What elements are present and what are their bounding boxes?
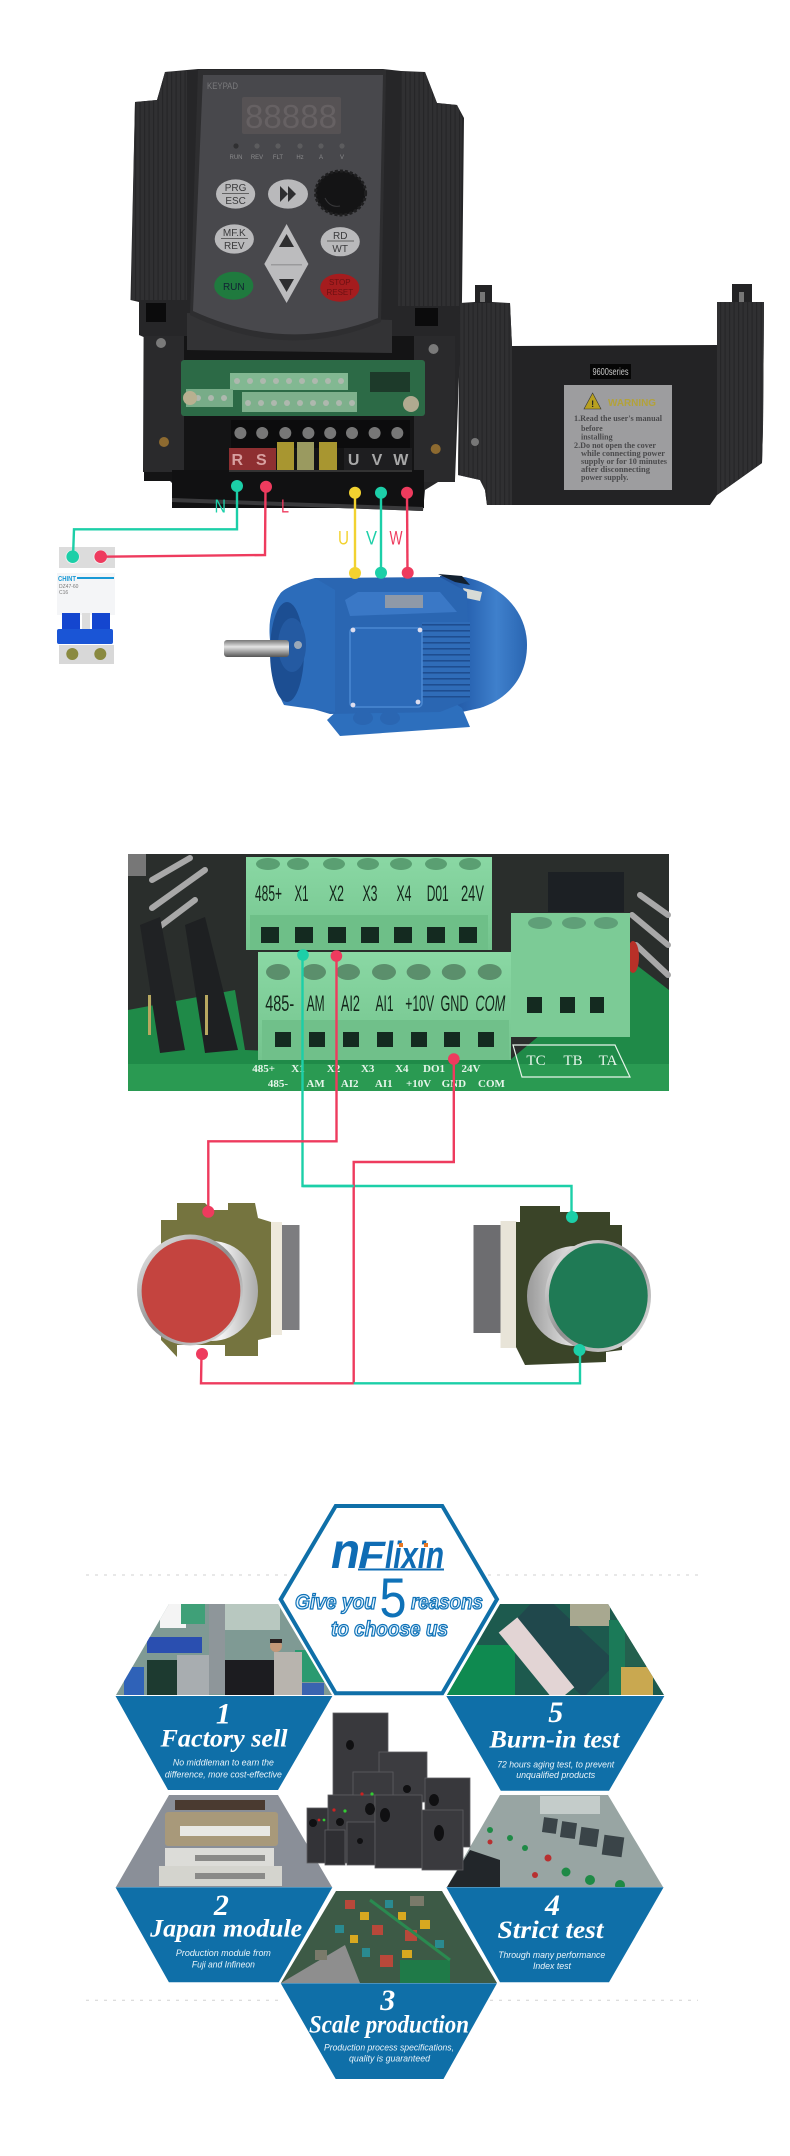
upper terminal block: 485+	[255, 881, 282, 906]
hexagon 5: burn-in test: 5	[548, 1696, 563, 1729]
status LEDs: V	[340, 155, 344, 161]
electric motor	[224, 574, 527, 736]
upper terminal block: X2	[329, 881, 344, 906]
key MF.K REV	[215, 224, 254, 254]
output wires U V W	[338, 487, 414, 579]
hexagon 4: strict test: Through many performance	[498, 1950, 605, 1960]
key RD WT: RD	[333, 231, 347, 242]
warning label: while connecting power	[581, 449, 665, 458]
upper terminal block: X4	[396, 881, 412, 906]
headline	[295, 1566, 483, 1641]
keypad label: KEYPAD	[207, 81, 238, 91]
relay terminal block	[511, 913, 630, 1037]
silkscreen terminal labels: 485-	[268, 1078, 288, 1090]
red push button	[137, 1203, 300, 1357]
key MF.K REV: REV	[224, 241, 245, 252]
test bench photo	[447, 1795, 663, 1887]
red LED	[627, 941, 639, 973]
knob	[316, 171, 366, 215]
up and down keys	[264, 224, 308, 303]
silkscreen terminal labels: 485+	[252, 1063, 275, 1075]
key PRG ESC	[216, 179, 255, 209]
product line-up of inverters	[307, 1713, 470, 1870]
status LEDs: RUN	[230, 155, 242, 161]
power terminals: S	[256, 452, 267, 469]
hexagon 2: japan module	[110, 1790, 340, 1982]
headline: to choose us	[331, 1618, 448, 1641]
burn-in photo	[447, 1604, 664, 1695]
dashed guide lines	[86, 1575, 698, 2000]
circuit breaker	[57, 547, 115, 664]
logo NFlixin: n	[331, 1523, 360, 1579]
silkscreen relay labels: TC	[526, 1053, 546, 1069]
series badge: 9600series	[592, 367, 628, 378]
warning label: 2.Do not open the cover	[574, 441, 656, 450]
warning label: after disconnecting	[581, 465, 650, 474]
warning label: supply or for 10 minutes	[581, 457, 667, 466]
motor fan cover	[440, 576, 527, 712]
circuit breaker: C16	[59, 590, 68, 596]
key PRG ESC: ESC	[225, 196, 246, 207]
warning label: before	[581, 424, 603, 433]
upper terminal block	[246, 857, 492, 950]
lower terminal block: GND	[440, 991, 468, 1016]
lower terminal block	[258, 952, 511, 1060]
logo NFlixin: lixin	[385, 1535, 444, 1577]
jumpers	[140, 917, 238, 1053]
silkscreen terminal labels: AI2	[341, 1078, 359, 1090]
hexagon 5: burn-in test	[445, 1600, 670, 1791]
logo NFlixin: F	[358, 1535, 387, 1577]
LED display: 88888	[245, 98, 337, 135]
silkscreen terminal labels	[252, 1063, 506, 1090]
silkscreen terminal labels: X1	[291, 1063, 305, 1075]
hexagon 5: burn-in test: 72 hours aging test, to prevent	[497, 1759, 615, 1769]
motor shaft	[224, 640, 289, 657]
centre hexagon: logo and headline	[281, 1506, 497, 1693]
output wires U V W: V	[366, 528, 377, 550]
key RUN: RUN	[223, 282, 245, 293]
warning label: installing	[581, 432, 613, 442]
upper terminal block: X3	[362, 881, 378, 906]
hexagon 4: strict test	[445, 1790, 670, 1982]
series badge	[590, 364, 631, 379]
hexagon 5: burn-in test: unqualified products	[516, 1770, 596, 1780]
key RUN	[214, 272, 253, 300]
control terminal photo	[128, 854, 669, 1091]
hexagon 3: scale production: quality is guaranteed	[349, 2054, 431, 2064]
warning label: power supply.	[581, 473, 628, 482]
upper terminal block: 24V	[461, 881, 484, 906]
key STOP RESET	[320, 274, 359, 302]
chassis screws	[156, 338, 441, 454]
power terminals: V	[372, 452, 383, 469]
upper terminal block: X1	[294, 881, 308, 906]
hexagon 5: burn-in test: Burn-in test	[488, 1726, 621, 1753]
hexagon 2: japan module: 2	[213, 1889, 229, 1922]
silkscreen terminal labels: DO1	[423, 1063, 445, 1075]
silkscreen terminal labels: +10V	[406, 1078, 431, 1090]
warning label: WARNING	[608, 398, 656, 409]
hexagon 3: scale production: Production process specifications,	[324, 2043, 454, 2053]
silkscreen terminal labels: X4	[395, 1063, 409, 1075]
logo NFlixin	[331, 1523, 444, 1579]
status LEDs	[230, 143, 345, 161]
hexagon 1: factory sell: difference, more cost-effective	[165, 1769, 282, 1779]
hexagon 4: strict test: Strict test	[498, 1917, 605, 1944]
silkscreen relay labels: TB	[563, 1053, 583, 1069]
lower terminal block: COM	[475, 991, 506, 1016]
silkscreen terminal labels: X3	[361, 1063, 375, 1075]
input wires N and L	[66, 480, 289, 563]
hexagon 3: scale production: Scale production	[309, 2011, 469, 2038]
key fast forward	[268, 179, 308, 209]
lower terminal block: 485-	[265, 991, 294, 1016]
keypad panel	[187, 70, 392, 353]
hexagon 1: factory sell	[110, 1600, 340, 1790]
hexagon 1: factory sell: No middleman to earn the	[173, 1758, 274, 1768]
power terminals: U	[348, 452, 359, 469]
lower terminal block: AI2	[341, 991, 360, 1016]
headline: reasons	[411, 1591, 483, 1614]
key RD WT	[321, 227, 360, 256]
hexagon 4: strict test: Index test	[533, 1961, 571, 1971]
hexagon 2: japan module: Japan module	[149, 1916, 302, 1943]
status LEDs: A	[319, 155, 323, 161]
input wires N and L: L	[281, 496, 289, 516]
motor housing	[300, 577, 470, 714]
status LEDs: REV	[251, 155, 263, 161]
control board	[181, 360, 425, 416]
hexagon 3: scale production	[278, 1888, 500, 2079]
status LEDs: Hz	[296, 155, 304, 161]
key RD WT: WT	[332, 244, 348, 255]
input wires N and L: N	[214, 496, 226, 516]
upper terminal block: D01	[427, 881, 449, 906]
power module photo	[116, 1795, 332, 1887]
inverter with open terminal cover	[130, 69, 464, 511]
key STOP RESET: STOP	[329, 278, 351, 287]
silkscreen terminal labels: AI1	[375, 1078, 393, 1090]
hexagon 3: scale production: 3	[379, 1984, 395, 2017]
hexagon 2: japan module: Production module from	[176, 1948, 271, 1958]
key PRG ESC: PRG	[225, 183, 247, 194]
key STOP RESET: RESET	[326, 288, 353, 297]
silkscreen terminal labels: COM	[478, 1078, 506, 1090]
key MF.K REV: MF.K	[223, 228, 246, 239]
terminal cover door	[458, 284, 764, 505]
silkscreen terminal labels: AM	[306, 1078, 325, 1090]
lower terminal block: AM	[307, 991, 325, 1016]
circuit breaker: CHINT	[58, 574, 76, 583]
power terminals: W	[393, 452, 409, 469]
heat sink stripes	[150, 858, 668, 975]
circuit breaker: DZ47-60	[59, 584, 79, 590]
motor terminal box	[350, 628, 422, 707]
warning label: !	[591, 399, 594, 409]
silkscreen relay labels: TA	[599, 1053, 618, 1069]
control wires	[196, 949, 586, 1383]
warning label	[564, 385, 672, 490]
hexagon 1: factory sell: Factory sell	[159, 1726, 288, 1753]
green push button	[474, 1206, 651, 1365]
power terminals: R	[232, 452, 244, 469]
factory photo	[116, 1604, 332, 1695]
headline: 5	[380, 1566, 406, 1629]
lower terminal block: AI1	[376, 991, 394, 1016]
warning label: 1.Read the user's manual	[574, 414, 663, 423]
headline: Give you	[295, 1591, 376, 1614]
silkscreen terminal labels: GND	[442, 1078, 466, 1090]
hexagon 1: factory sell: 1	[216, 1697, 231, 1730]
status LEDs: FLT	[273, 155, 283, 161]
circuit board photo	[278, 1888, 500, 1986]
lower terminal block: +10V	[405, 991, 434, 1016]
silkscreen terminal labels: 24V	[462, 1063, 481, 1075]
motor feet	[327, 700, 470, 736]
output wires U V W: U	[338, 528, 349, 550]
power terminals	[229, 420, 412, 472]
hexagon 4: strict test: 4	[544, 1889, 560, 1922]
silkscreen relay labels	[513, 1045, 630, 1077]
output wires U V W: W	[390, 528, 403, 550]
silkscreen terminal labels: X2	[327, 1063, 341, 1075]
hexagon 2: japan module: Fuji and Infineon	[192, 1960, 255, 1970]
